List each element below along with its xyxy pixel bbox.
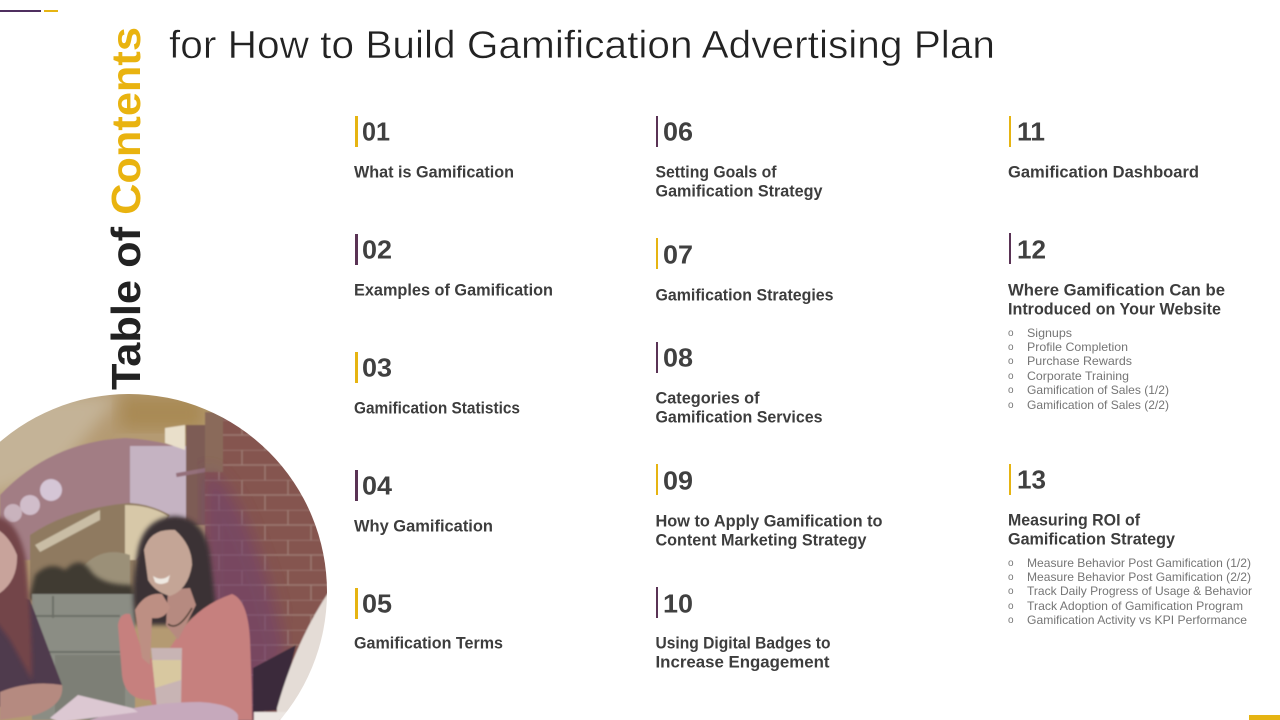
item 04 — [354, 470, 493, 536]
item 04: 04 — [362, 470, 393, 500]
top accent lines — [0, 10, 58, 12]
item 12 — [1008, 233, 1225, 412]
column 1 — [354, 116, 553, 652]
item 07: Gamification Strategies — [656, 286, 834, 304]
item 12: 12 — [1017, 234, 1046, 264]
item 09: 09 — [663, 466, 693, 496]
item 06 — [656, 116, 823, 200]
item 10: Increase Engagement — [656, 654, 830, 672]
notebook — [50, 695, 138, 720]
item 01: 01 — [362, 116, 390, 146]
woman right: hand and arm — [135, 594, 170, 665]
item 05: 05 — [362, 588, 392, 618]
list: item 13 topics: Track Adoption of Gamification Program — [1027, 599, 1243, 613]
item 09: Content Marketing Strategy — [656, 532, 867, 550]
item 01: What is Gamification — [354, 164, 514, 182]
item 07: 07 — [663, 240, 693, 270]
woman right: body — [118, 594, 252, 720]
list: item 13 topics: o — [1008, 558, 1014, 569]
item 06: Gamification Strategy — [656, 182, 823, 200]
item 02 — [354, 234, 553, 300]
item 13: Gamification Strategy — [1008, 530, 1176, 548]
plants — [30, 562, 135, 600]
item 09 — [656, 464, 882, 550]
item 13: 13 — [1017, 464, 1046, 494]
list: item 12 topics: Signups — [1027, 326, 1072, 340]
woman left — [0, 599, 62, 707]
list: item 13 topics: o — [1008, 572, 1014, 583]
item 08: 08 — [663, 342, 693, 372]
item 09: How to Apply Gamification to — [656, 512, 882, 530]
table — [90, 702, 238, 720]
item 02: Examples of Gamification — [354, 282, 553, 300]
item 05: Gamification Terms — [354, 634, 503, 652]
item 13 — [1008, 464, 1252, 627]
item 07 — [656, 238, 834, 304]
list: item 13 topics: Track Daily Progress of Usage & Behavior — [1027, 584, 1252, 598]
corner accent — [1249, 715, 1280, 720]
lamps — [40, 479, 62, 501]
chair — [253, 645, 296, 712]
item 04: Why Gamification — [354, 518, 493, 536]
woman right: hair — [133, 516, 216, 625]
list: item 12 topics: Gamification of Sales (2/2) — [1027, 398, 1169, 412]
shelves arch — [30, 503, 170, 600]
item 01 — [354, 116, 514, 182]
wall and ceiling — [0, 394, 213, 720]
item 11: 11 — [1017, 116, 1045, 146]
column 2 — [656, 116, 882, 672]
woman right: neck — [166, 588, 196, 640]
item 05 — [354, 588, 503, 652]
photo: people at a cafe table in a circular crop — [0, 390, 335, 720]
list: item 12 topics: o — [1008, 328, 1014, 339]
item 06: Setting Goals of — [656, 164, 777, 182]
item 12: Introduced on Your Website — [1008, 300, 1221, 318]
person far right — [277, 590, 330, 720]
item 11 — [1008, 116, 1199, 182]
purple arch — [0, 438, 187, 560]
list: item 13 topics: o — [1008, 586, 1014, 597]
list: item 12 topics: Profile Completion — [1027, 340, 1128, 354]
item 10 — [656, 587, 830, 672]
vertical title: Table of Contents: Table of Contents — [103, 27, 149, 390]
list: item 12 topics: o — [1008, 371, 1014, 382]
list: item 12 topics: o — [1008, 385, 1014, 396]
heading: for How to Build Gamification Advertising Plan — [169, 24, 995, 67]
item 03: 03 — [362, 352, 392, 382]
item 10: 10 — [663, 588, 693, 618]
planter — [32, 594, 135, 720]
item 08: Categories of — [656, 390, 760, 408]
list: item 13 topics: Gamification Activity vs KPI Performance — [1027, 613, 1247, 627]
list: item 13 topics — [1008, 556, 1252, 627]
item 03: Gamification Statistics — [354, 400, 520, 418]
list: item 13 topics: o — [1008, 615, 1014, 626]
column 3 — [1008, 116, 1252, 627]
item 03 — [354, 352, 520, 418]
list: item 13 topics: Measure Behavior Post Gamification (2/2) — [1027, 570, 1251, 584]
list: item 12 topics: Purchase Rewards — [1027, 354, 1132, 368]
item 11: Gamification Dashboard — [1008, 164, 1199, 182]
list: item 13 topics: o — [1008, 601, 1014, 612]
item 08: Gamification Services — [656, 408, 822, 426]
list: item 12 topics: o — [1008, 342, 1014, 353]
item 13: Measuring ROI of — [1008, 512, 1140, 530]
list: item 12 topics — [1008, 326, 1169, 412]
list: item 12 topics: o — [1008, 400, 1014, 411]
item 08 — [656, 342, 822, 426]
list: item 12 topics: o — [1008, 356, 1014, 367]
list: item 12 topics: Gamification of Sales (1/2) — [1027, 383, 1169, 397]
item 12: Where Gamification Can be — [1008, 282, 1225, 300]
item 10: Using Digital Badges to — [656, 634, 830, 652]
list: item 12 topics: Corporate Training — [1027, 369, 1129, 383]
item 06: 06 — [663, 116, 693, 146]
woman right: face — [144, 530, 192, 596]
item 02: 02 — [362, 234, 392, 264]
brick wall — [205, 412, 335, 720]
glass — [151, 648, 182, 709]
list: item 13 topics: Measure Behavior Post Gamification (1/2) — [1027, 556, 1251, 570]
